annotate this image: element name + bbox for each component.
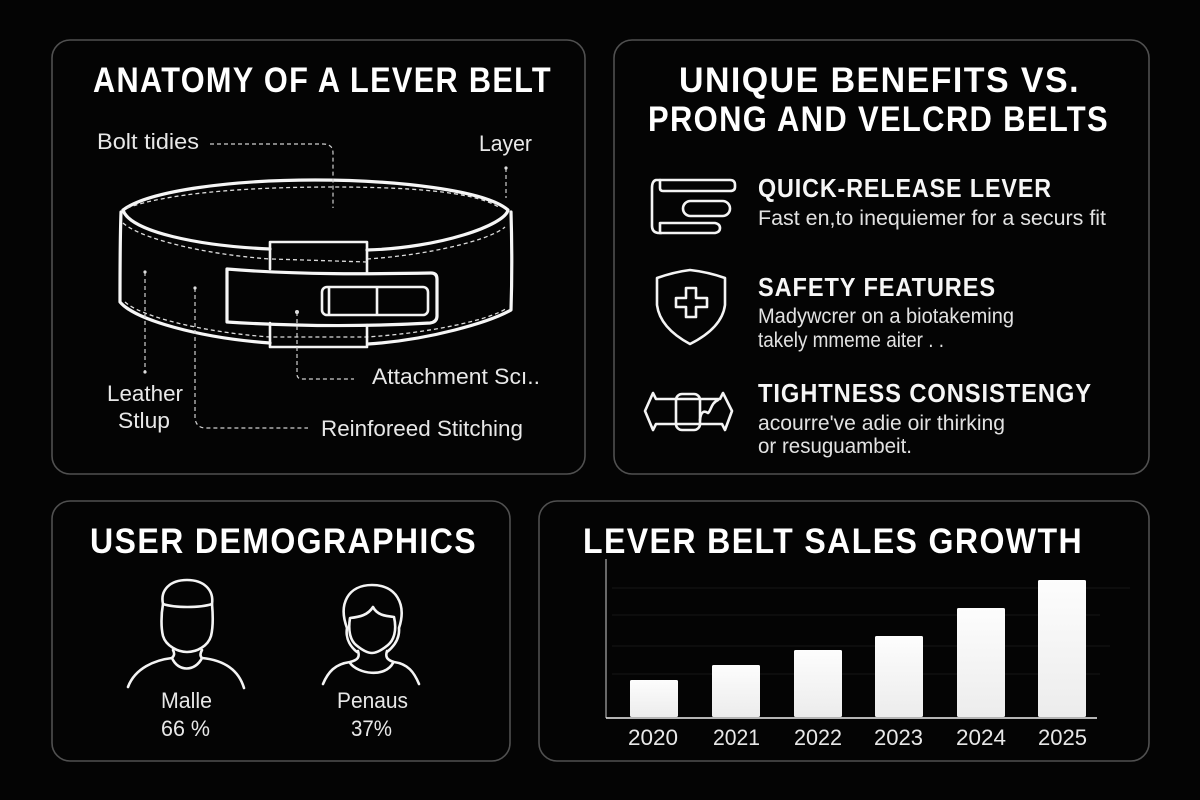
demographic label: male (161, 688, 212, 741)
benefit: tightness consistency (758, 378, 1092, 458)
benefit: quick-release lever (758, 173, 1106, 230)
axis labels: 2021 (713, 725, 760, 750)
demographic label: female: Penaus (337, 688, 408, 713)
benefit: tightness consistency: or resuguambeit. (758, 435, 912, 458)
demographic label: female (337, 688, 408, 741)
callout: attachment screw (295, 310, 540, 389)
benefit: safety features (758, 272, 1014, 352)
axis labels: 2020 (628, 725, 678, 750)
callout: reinforced stitching (193, 286, 523, 441)
icon: tightness (645, 393, 732, 430)
benefit: safety features: SAFETY FEATURES (758, 272, 996, 302)
benefit: quick-release lever: Fast en,to inequiemer for a securs fit (758, 207, 1106, 230)
demographic label: female: 37% (351, 716, 392, 741)
heading: sales growth: LEVER BELT SALES GROWTH (583, 522, 1083, 561)
axis labels (628, 725, 1087, 750)
axis labels: 2024 (956, 725, 1006, 750)
bar: 2021 (712, 665, 760, 717)
chart axes (606, 559, 1097, 718)
callout: layer: Layer (479, 131, 532, 156)
benefit: tightness consistency: TIGHTNESS CONSISTENGY (758, 378, 1092, 408)
heading: user demographics: USER DEMOGRAPHICS (90, 522, 477, 561)
axis labels: 2025 (1038, 725, 1087, 750)
callout: bolt tidies: Bolt tidies (97, 129, 199, 154)
callout: layer (479, 131, 532, 198)
icon: quick-release lever (652, 180, 735, 233)
belt illustration (120, 180, 512, 347)
axis labels: 2022 (794, 725, 842, 750)
icon: safety shield (657, 270, 725, 344)
heading: unique benefits: PRONG AND VELCRD BELTS (648, 100, 1109, 139)
bar: 2020 (630, 680, 678, 717)
callout: leather strap: Leather (107, 381, 183, 406)
bar chart (606, 559, 1130, 750)
lever plate (227, 269, 437, 326)
bar: 2023 (875, 636, 923, 717)
buckle keepers (270, 242, 367, 347)
bar: 2024 (957, 608, 1005, 717)
benefit: safety features: takely mmeme aiter . . (758, 329, 944, 352)
panel: unique benefits (614, 40, 1149, 474)
panel: user demographics (52, 501, 510, 761)
benefit: tightness consistency: acourre've adie oir thirking (758, 412, 1005, 435)
callout: leather strap: Stlup (118, 408, 170, 433)
bar: 2022 (794, 650, 842, 717)
icon: male user (128, 580, 244, 688)
bar: 2025 (1038, 580, 1086, 717)
benefit: quick-release lever: QUICK-RELEASE LEVER (758, 173, 1052, 203)
benefit: safety features: Madywcrer on a biotakeming (758, 305, 1014, 328)
callout: attachment screw: Attachment Scı.. (372, 364, 540, 389)
icon: female user (323, 585, 419, 684)
callout: bolt tidies (97, 129, 333, 208)
demographic label: male: 66 % (161, 716, 210, 741)
heading: anatomy: ANATOMY OF A LEVER BELT (93, 61, 552, 100)
demographic label: male: Malle (161, 688, 212, 713)
heading: unique benefits: UNIQUE BENEFITS VS. (679, 61, 1080, 100)
callout: reinforced stitching: Reinforeed Stitching (321, 416, 523, 441)
panel: anatomy of a lever belt (52, 40, 585, 474)
panel: sales growth (539, 501, 1149, 761)
heading: unique benefits (648, 61, 1109, 139)
callout: leather strap (107, 270, 183, 433)
axis labels: 2023 (874, 725, 923, 750)
